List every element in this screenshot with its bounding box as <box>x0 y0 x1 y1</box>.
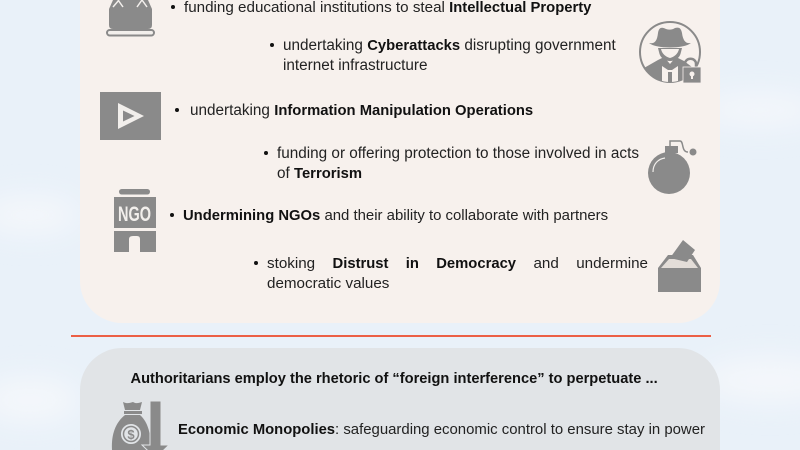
divider <box>71 335 711 337</box>
bullet: cyberattacks: undertaking Cyberattacks disrupting government <box>283 37 616 54</box>
bullet: terrorism: funding or offering protection to those involved in acts <box>277 145 639 162</box>
icon: video play <box>100 92 161 140</box>
bullet: information manipulation: undertaking Information Manipulation Operations <box>190 102 533 119</box>
panel: authoritarian tactics <box>80 0 720 323</box>
bullet: distrust in democracy: stoking Distrust in Democracy and undermine <box>267 255 648 272</box>
economic monopolies text: Economic Monopolies: safeguarding economic control to ensure stay in power <box>178 421 705 438</box>
icon: ballot box <box>658 240 701 292</box>
bullet: terrorism <box>264 145 639 182</box>
icon: money bag with down arrow: $ <box>127 427 135 442</box>
bullet: undermining NGOs: Undermining NGOs and their ability to collaborate with partners <box>183 207 608 224</box>
icon: money bag with down arrow <box>112 402 168 450</box>
bullet: terrorism: of Terrorism <box>277 165 362 182</box>
panel: foreign interference rhetoric <box>80 348 720 450</box>
icon: bomb <box>648 140 696 194</box>
bullet: distrust in democracy: democratic values <box>267 275 389 292</box>
bullet: cyberattacks: internet infrastructure <box>283 57 428 74</box>
panel heading: Authoritarians employ the rhetoric of “foreign interference” to perpetuate ... <box>130 371 658 387</box>
bullet: cyberattacks <box>270 37 616 74</box>
icon: hacker <box>639 21 701 83</box>
icon: NGO building <box>114 189 156 252</box>
bullet: distrust in democracy <box>254 255 648 292</box>
icon: laptop <box>106 0 155 36</box>
